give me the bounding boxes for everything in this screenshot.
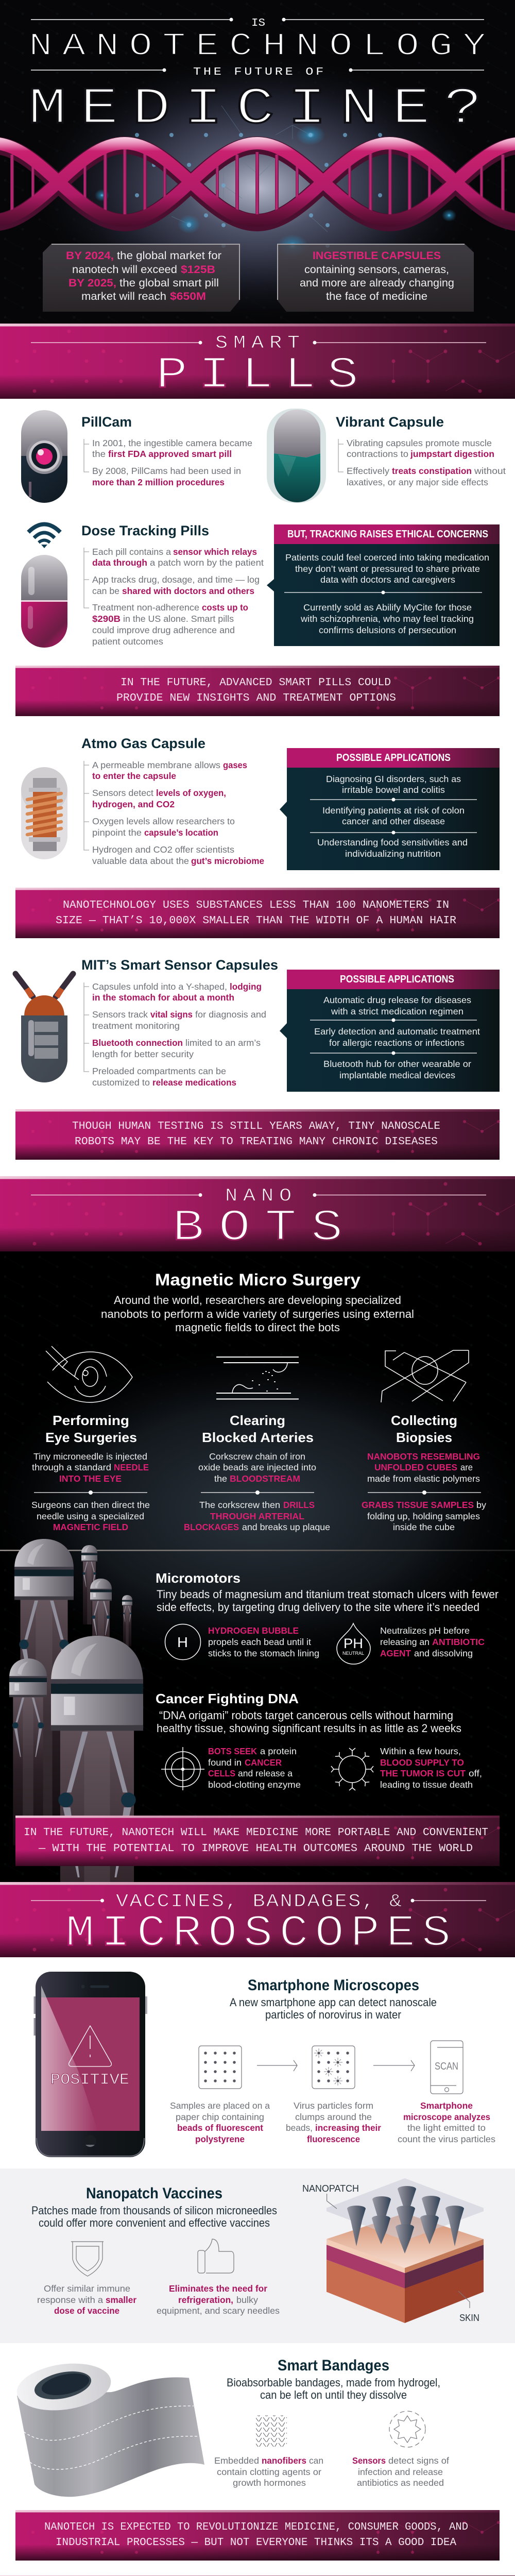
panel: possible applications mit: Automatic drug release for diseases bbox=[323, 995, 471, 1005]
icon: pillcam capsule bbox=[21, 410, 67, 503]
text block: performing eye surgeries: needle using a specialized bbox=[37, 1511, 144, 1521]
panel: white smart pills content background bbox=[0, 399, 515, 1176]
title: is nanotechnology the future of medicine: THE FUTURE OF bbox=[193, 66, 326, 78]
icon: hydrogen bubble: H bbox=[177, 1634, 188, 1650]
panel: ethical concerns: they don’t want or pressured to share private bbox=[295, 564, 480, 574]
panel: market statistics: the global smart pill bbox=[119, 277, 219, 289]
panel: possible applications atmo: Identifying patients at risk of colon bbox=[322, 805, 465, 816]
callout: revolutionize medicine bbox=[15, 2510, 500, 2561]
text block: vibrant capsule: jumpstart digestion bbox=[410, 449, 494, 459]
text block: immune response bbox=[37, 2283, 136, 2316]
text block: cancer fighting dna bbox=[156, 1691, 461, 1735]
text block: micromotors: Micromotors bbox=[156, 1570, 241, 1586]
callout: advanced smart pills: PROVIDE NEW INSIGHTS AND TREATMENT OPTIONS bbox=[116, 692, 396, 704]
text block: blood supply bbox=[380, 1746, 482, 1790]
text block: performing eye surgeries bbox=[31, 1413, 150, 1532]
text block: vibrant capsule bbox=[336, 414, 506, 487]
text block: mit smart sensor capsules: MIT’s Smart Sensor Capsules bbox=[81, 957, 278, 973]
text block: atmo gas capsule: to enter the capsule bbox=[92, 771, 176, 781]
text block: pillcam: first FDA approved smart pill bbox=[108, 449, 232, 459]
text block: refrigeration: refrigeration, bbox=[178, 2295, 233, 2305]
text block: ph neutral: Neutralizes pH before bbox=[380, 1625, 470, 1636]
text block: step two: clumps around the bbox=[295, 2112, 372, 2122]
text block: dose tracking pills: App tracks drug, dosage, and time — log bbox=[92, 574, 260, 585]
text block: atmo gas capsule bbox=[81, 736, 264, 866]
text block: collecting biopsies: by bbox=[476, 1500, 486, 1510]
panel: market statistics bbox=[43, 244, 240, 312]
text block: magnetic micro surgery: Around the world, researchers are developing specialized bbox=[114, 1294, 401, 1307]
text block: step three: the light emitted to bbox=[407, 2123, 486, 2133]
text block: bots seek bbox=[208, 1746, 301, 1790]
text block: performing eye surgeries: INTO THE EYE bbox=[59, 1473, 122, 1484]
panel: possible applications atmo bbox=[280, 748, 500, 870]
text block: mit smart sensor capsules: lodging bbox=[230, 981, 262, 992]
banner: smart pills heading bbox=[0, 324, 515, 400]
callout: revolutionize medicine: NANOTECH IS EXPECTED TO REVOLUTIONIZE MEDICINE, CONSUMER GOODS, AND bbox=[44, 2521, 468, 2533]
text block: blood supply: Within a few hours, bbox=[380, 1746, 461, 1756]
text block: atmo gas capsule: gut’s microbiome bbox=[191, 856, 264, 866]
icon: ph neutral drop: NEUTRAL bbox=[342, 1651, 364, 1656]
text block: magnetic micro surgery: Magnetic Micro Surgery bbox=[155, 1270, 360, 1289]
callout: nanoscale robots: THOUGH HUMAN TESTING IS STILL YEARS AWAY, TINY NANOSCALE bbox=[72, 1121, 440, 1132]
text block: nanopatch vaccines: could offer more convenient and effective vaccines bbox=[39, 2216, 270, 2229]
icon: mit smart sensor capsule bbox=[15, 974, 73, 1082]
panel: possible applications atmo: individualizing nutrition bbox=[345, 849, 441, 859]
text block: blood supply: BLOOD SUPPLY TO bbox=[380, 1757, 464, 1768]
icon: phone scan bbox=[431, 2041, 463, 2094]
arrow: step two to three bbox=[373, 2060, 415, 2071]
text block: dose tracking pills: Each pill contains a bbox=[92, 547, 171, 557]
panel: market statistics: $650M bbox=[170, 291, 206, 302]
text block: step one bbox=[170, 2100, 270, 2144]
text block: collecting biopsies: made from elastic polymers bbox=[367, 1473, 480, 1484]
text block: vibrant capsule: laxatives, or any major side effects bbox=[347, 477, 488, 487]
text block: step three: count the virus particles bbox=[398, 2134, 495, 2144]
text block: smart bandages: Bioabsorbable bandages, made from hydrogel, bbox=[227, 2376, 440, 2389]
text block: atmo gas capsule: Hydrogen and CO2 offer scientists bbox=[92, 844, 234, 855]
text block: immune response: response with a bbox=[37, 2295, 103, 2305]
text block: vibrant capsule: without bbox=[474, 466, 506, 476]
text block: performing eye surgeries: MAGNETIC FIELD bbox=[53, 1522, 128, 1532]
icon: wifi signal bbox=[28, 524, 60, 548]
title: is nanotechnology the future of medicine: IS bbox=[251, 18, 265, 29]
text block: sensors: antibiotics as needed bbox=[357, 2478, 444, 2488]
text block: pillcam: PillCam bbox=[81, 414, 132, 430]
text block: step one: beads of fluorescent bbox=[177, 2123, 263, 2133]
panel: ethical concerns: with schizophrenia, who may feel tracking bbox=[300, 614, 474, 624]
callout: advanced smart pills bbox=[15, 666, 500, 716]
text block: refrigeration bbox=[157, 2283, 280, 2316]
text block: mit smart sensor capsules: in the stomach for about a month bbox=[92, 992, 234, 1003]
text block: bots seek: and release a bbox=[238, 1768, 293, 1778]
panel: market statistics: market will reach bbox=[81, 291, 166, 302]
text block: dose tracking pills: Dose Tracking Pills bbox=[81, 523, 209, 538]
text block: step two: beads, bbox=[286, 2123, 313, 2133]
panel: possible applications atmo: Diagnosing GI disorders, such as bbox=[326, 774, 461, 784]
text block: atmo gas capsule: Atmo Gas Capsule bbox=[81, 736, 205, 751]
text block: performing eye surgeries: through a standard bbox=[32, 1462, 111, 1472]
text block: collecting biopsies: are bbox=[460, 1462, 473, 1472]
text block: bots seek: blood-clotting enzyme bbox=[208, 1780, 301, 1790]
text block: pillcam: the bbox=[92, 449, 106, 459]
text block: dose tracking pills: sensor which relays bbox=[173, 547, 257, 557]
text block: mit smart sensor capsules: Preloaded compartments can be bbox=[92, 1066, 226, 1076]
icon: vibrant capsule bbox=[267, 409, 326, 503]
text block: nanopatch vaccines bbox=[31, 2185, 277, 2229]
text block: step one: Samples are placed on a bbox=[170, 2100, 270, 2111]
text block: step one: paper chip containing bbox=[176, 2112, 264, 2122]
text block: clearing blocked arteries bbox=[184, 1413, 330, 1532]
text block: hydrogen bubble: propels each bead until it bbox=[208, 1637, 311, 1647]
title: is nanotechnology the future of medicine: NANOTECHNOLOGY bbox=[29, 28, 496, 64]
banner: vaccines bandages microscopes heading: VACCINES, BANDAGES, & bbox=[116, 1891, 403, 1912]
text block: pillcam bbox=[81, 414, 252, 487]
panel: market statistics: BY 2025, bbox=[68, 277, 116, 289]
illustration: micromotor robots bbox=[9, 1539, 143, 2094]
text block: pillcam: By 2008, PillCams had been used in bbox=[92, 466, 241, 476]
panel: possible applications atmo: cancer and other disease bbox=[342, 816, 445, 826]
panel: ethical concerns: Patients could feel coerced into taking medication bbox=[285, 552, 489, 563]
text block: clearing blocked arteries: BLOODSTREAM bbox=[230, 1473, 300, 1484]
text block: smart bandages: Smart Bandages bbox=[278, 2357, 389, 2374]
text block: dose tracking pills: can be bbox=[92, 586, 119, 596]
panel: possible applications mit: for allergic reactions or infections bbox=[329, 1038, 465, 1048]
text block: atmo gas capsule: levels of oxygen, bbox=[156, 788, 226, 798]
text block: bots seek: CANCER bbox=[245, 1757, 282, 1768]
text block: ph neutral bbox=[380, 1625, 485, 1658]
text block: clearing blocked arteries: THROUGH ARTERIAL bbox=[210, 1511, 304, 1521]
text block: smartphone microscopes: Smartphone Microscopes bbox=[248, 1977, 419, 1994]
icon: phone scan: SCAN bbox=[435, 2061, 458, 2072]
text block: step three: microscope analyzes bbox=[403, 2112, 490, 2122]
icon: nanofibers bbox=[256, 2415, 287, 2447]
callout: nanotechnology size: SIZE — THAT’S 10,000X SMALLER THAN THE WIDTH OF A HUMAN HAIR bbox=[56, 915, 456, 927]
title: is nanotechnology the future of medicine: MEDICINE? bbox=[28, 80, 495, 139]
callout: advanced smart pills: IN THE FUTURE, ADVANCED SMART PILLS COULD bbox=[121, 677, 391, 689]
text block: step one: polystyrene bbox=[195, 2134, 245, 2144]
text block: pillcam: more than 2 million procedures bbox=[92, 477, 225, 487]
panel: market statistics: the global market for bbox=[117, 250, 221, 262]
text block: cancer fighting dna: healthy tissue, showing significant results in as little as 2 weeks bbox=[157, 1722, 461, 1735]
text block: collecting biopsies: folding up, holding samples bbox=[367, 1511, 480, 1521]
text block: dose tracking pills: Treatment non-adherence bbox=[92, 602, 199, 613]
banner: nano bots heading: NANO bbox=[225, 1186, 297, 1207]
text block: collecting biopsies: UNFOLDED CUBES bbox=[374, 1462, 457, 1472]
illustration: nanopatch on skin: SKIN bbox=[459, 2313, 479, 2323]
text block: cancer fighting dna: “DNA origami” robots target cancerous cells without harming bbox=[159, 1709, 453, 1722]
text block: blood supply: THE TUMOR IS CUT bbox=[380, 1768, 466, 1778]
panel: market statistics: BY 2024, bbox=[66, 250, 114, 262]
text block: performing eye surgeries: Performing bbox=[53, 1413, 129, 1428]
panel: possible applications mit: implantable medical devices bbox=[339, 1070, 455, 1080]
text block: atmo gas capsule: Oxygen levels allow researchers to bbox=[92, 816, 235, 826]
text block: smart bandages: can be left on until they dissolve bbox=[260, 2388, 407, 2401]
text block: mit smart sensor capsules: Sensors track bbox=[92, 1009, 148, 1020]
text block: sensors bbox=[352, 2455, 449, 2488]
callout: nanoscale robots: ROBOTS MAY BE THE KEY TO TREATING MANY CHRONIC DISEASES bbox=[75, 1136, 438, 1148]
panel: ingestible capsules: and more are already changing bbox=[300, 277, 454, 289]
icon: ph neutral drop bbox=[337, 1623, 370, 1664]
banner: smart pills heading: SMART bbox=[215, 333, 305, 353]
panel: ingestible capsules bbox=[277, 244, 474, 312]
panel: ethical concerns: data with doctors and caregivers bbox=[320, 574, 455, 585]
text block: immune response: Offer similar immune bbox=[44, 2283, 130, 2294]
text block: step two bbox=[286, 2100, 381, 2144]
text block: atmo gas capsule: hydrogen, and CO2 bbox=[92, 799, 175, 809]
text block: immune response: dose of vaccine bbox=[54, 2306, 119, 2316]
illustration: nanopatch on skin bbox=[302, 2178, 484, 2323]
icon: dose tracking pill bbox=[21, 555, 67, 648]
text block: bots seek: CELLS bbox=[208, 1768, 235, 1778]
text block: hydrogen bubble bbox=[208, 1625, 319, 1658]
text block: atmo gas capsule: capsule’s location bbox=[144, 827, 218, 838]
text block: performing eye surgeries: Surgeons can then direct the bbox=[31, 1500, 150, 1510]
text block: nanofibers bbox=[214, 2455, 323, 2488]
panel: possible applications atmo: irritable bowel and colitis bbox=[342, 785, 445, 795]
text block: mit smart sensor capsules: treatment monitoring bbox=[92, 1021, 180, 1031]
text block: smartphone microscopes: particles of norovirus in water bbox=[265, 2008, 401, 2021]
text block: mit smart sensor capsules: vital signs bbox=[150, 1009, 193, 1020]
text block: smart bandages bbox=[227, 2357, 440, 2401]
icon: blocked artery bbox=[216, 1357, 299, 1399]
arrow: step one to two bbox=[257, 2060, 297, 2071]
text block: performing eye surgeries: Tiny microneedle is injected bbox=[33, 1451, 147, 1462]
text block: dose tracking pills: shared with doctors and others bbox=[122, 586, 254, 596]
text block: mit smart sensor capsules: customized to bbox=[92, 1077, 150, 1088]
text block: step three: Smartphone bbox=[420, 2100, 473, 2111]
icon: shield bbox=[71, 2242, 104, 2276]
text block: magnetic micro surgery: nanobots to perform a wide variety of surgeries using external bbox=[101, 1308, 414, 1320]
callout: nanotechnology size: NANOTECHNOLOGY USES SUBSTANCES LESS THAN 100 NANOMETERS IN bbox=[63, 900, 449, 911]
text block: dose tracking pills: costs up to bbox=[202, 602, 248, 613]
panel: header background bbox=[0, 0, 515, 332]
text block: collecting biopsies bbox=[362, 1413, 486, 1532]
text block: performing eye surgeries: Eye Surgeries bbox=[45, 1430, 137, 1445]
panel: ingestible capsules: INGESTIBLE CAPSULES bbox=[313, 250, 441, 262]
icon: ph neutral drop: PH bbox=[344, 1636, 363, 1651]
text block: atmo gas capsule: A permeable membrane allows bbox=[92, 760, 220, 770]
text block: nanofibers: contain clotting agents or bbox=[217, 2467, 321, 2477]
banner: nano bots heading: BOTS bbox=[172, 1202, 357, 1253]
text block: step two: Virus particles form bbox=[294, 2100, 373, 2111]
text block: smartphone microscopes: A new smartphone app can detect nanoscale bbox=[230, 1996, 437, 2009]
panel: ethical concerns: confirms delusions of persecution bbox=[319, 625, 456, 635]
banner: vaccines bandages microscopes heading: MICROSCOPES bbox=[65, 1908, 457, 1959]
callout: nanotechnology size bbox=[15, 888, 500, 938]
text block: step three bbox=[398, 2100, 495, 2144]
text block: mit smart sensor capsules bbox=[81, 957, 278, 1088]
text block: collecting biopsies: NANOBOTS RESEMBLING bbox=[367, 1451, 480, 1462]
callout: portable medicine: — WITH THE POTENTIAL TO IMPROVE HEALTH OUTCOMES AROUND THE WORLD bbox=[38, 1843, 473, 1855]
banner: challenges heading bbox=[0, 2575, 515, 2576]
panel: possible applications mit: with a strict medication regimen bbox=[331, 1006, 464, 1016]
callout: portable medicine bbox=[15, 1816, 500, 1866]
text block: vibrant capsule: contractions to bbox=[347, 449, 408, 459]
text block: micromotors: Tiny beads of magnesium and titanium treat stomach ulcers with fewer bbox=[157, 1588, 499, 1601]
text block: ph neutral: ANTIBIOTIC bbox=[432, 1637, 485, 1647]
panel: ethical concerns: BUT, TRACKING RAISES ETHICAL CONCERNS bbox=[287, 529, 488, 540]
text block: blood supply: leading to tissue death bbox=[380, 1780, 473, 1790]
text block: immune response: smaller bbox=[106, 2295, 136, 2305]
panel: market statistics: $125B bbox=[181, 264, 215, 276]
text block: vibrant capsule: Vibrating capsules promote muscle bbox=[347, 438, 492, 448]
text block: nanofibers: Embedded bbox=[214, 2455, 259, 2466]
text block: dose tracking pills bbox=[81, 523, 264, 647]
banner: smart pills heading: PILLS bbox=[156, 350, 370, 400]
panel: nanobots dark background bbox=[0, 1251, 515, 1882]
text block: dose tracking pills: $290B bbox=[92, 614, 121, 624]
text block: clearing blocked arteries: Corkscrew chain of iron bbox=[209, 1451, 305, 1462]
illustration: smartphone positive result: POSITIVE bbox=[50, 2071, 129, 2089]
icon: thumbs up bbox=[198, 2239, 234, 2273]
text block: sensors: infection and release bbox=[358, 2467, 443, 2477]
text block: nanopatch vaccines: Nanopatch Vaccines bbox=[86, 2185, 222, 2202]
text block: collecting biopsies: Biopsies bbox=[396, 1430, 452, 1445]
text block: step two: fluorescence bbox=[307, 2134, 360, 2144]
icon: eye surgery bbox=[46, 1346, 132, 1402]
text block: clearing blocked arteries: oxide beads are injected into bbox=[198, 1462, 316, 1472]
text block: pillcam: In 2001, the ingestible camera became bbox=[92, 438, 252, 448]
title: is nanotechnology the future of medicine bbox=[28, 18, 496, 139]
text block: vibrant capsule: Effectively bbox=[347, 466, 389, 476]
panel: possible applications mit bbox=[280, 970, 500, 1092]
text block: mit smart sensor capsules: limited to an arm’s bbox=[185, 1038, 261, 1048]
text block: bots seek: a protein bbox=[260, 1746, 297, 1756]
text block: hydrogen bubble: sticks to the stomach lining bbox=[208, 1648, 319, 1658]
text block: dose tracking pills: patient outcomes bbox=[92, 636, 163, 647]
text block: dose tracking pills: in the US alone. Smart pills bbox=[123, 614, 234, 624]
text block: mit smart sensor capsules: Bluetooth connection bbox=[92, 1038, 183, 1048]
text block: collecting biopsies: GRABS TISSUE SAMPLES bbox=[362, 1500, 474, 1510]
text block: vibrant capsule: Vibrant Capsule bbox=[336, 414, 444, 430]
text block: performing eye surgeries: NEEDLE bbox=[114, 1462, 149, 1472]
text block: clearing blocked arteries: and breaks up plaque bbox=[242, 1522, 330, 1532]
icon: chip with fluorescent clumps bbox=[312, 2046, 355, 2089]
text block: clearing blocked arteries: BLOCKAGES bbox=[184, 1522, 239, 1532]
text block: clearing blocked arteries: Blocked Arteries bbox=[202, 1430, 314, 1445]
text block: ph neutral: and dissolving bbox=[414, 1648, 473, 1658]
text block: clearing blocked arteries: the bbox=[214, 1473, 227, 1484]
icon: sensor gear bbox=[389, 2411, 425, 2447]
text block: refrigeration: equipment, and scary needles bbox=[157, 2306, 280, 2316]
panel: white vaccines content background bbox=[0, 1957, 515, 2575]
text block: ph neutral: AGENT bbox=[380, 1648, 411, 1658]
text block: step two: increasing their bbox=[315, 2123, 381, 2133]
text block: atmo gas capsule: Sensors detect bbox=[92, 788, 153, 798]
text block: mit smart sensor capsules: for diagnosis and bbox=[195, 1009, 266, 1020]
panel: possible applications mit: Bluetooth hub for other wearable or bbox=[323, 1059, 471, 1069]
text block: magnetic micro surgery bbox=[101, 1270, 414, 1334]
text block: ph neutral: releasing an bbox=[380, 1637, 430, 1647]
text block: atmo gas capsule: gases bbox=[223, 760, 247, 770]
text block: clearing blocked arteries: DRILLS bbox=[283, 1500, 315, 1510]
icon: atmo gas capsule bbox=[21, 767, 67, 859]
text block: hydrogen bubble: HYDROGEN BUBBLE bbox=[208, 1625, 299, 1636]
icon: tumor cell bbox=[331, 1748, 373, 1790]
icon: unfolded cube biopsy bbox=[381, 1350, 469, 1402]
text block: refrigeration: bulky bbox=[236, 2295, 258, 2305]
text block: mit smart sensor capsules: length for better security bbox=[92, 1049, 194, 1059]
illustration: bandage roll bbox=[14, 2358, 204, 2497]
text block: atmo gas capsule: valuable data about the bbox=[92, 856, 189, 866]
icon: paper chip with beads bbox=[199, 2046, 242, 2089]
icon: target bbox=[161, 1747, 204, 1790]
text block: nanofibers: growth hormones bbox=[233, 2478, 306, 2488]
text block: bots seek: found in bbox=[208, 1757, 242, 1768]
text block: sensors: Sensors bbox=[352, 2455, 386, 2466]
icon: hydrogen bubble bbox=[165, 1624, 201, 1660]
panel: market statistics: nanotech will exceed bbox=[72, 264, 177, 276]
panel: ethical concerns bbox=[267, 524, 500, 646]
text block: magnetic micro surgery: magnetic fields to direct the bots bbox=[175, 1321, 340, 1334]
panel: ingestible capsules: the face of medicine bbox=[326, 291, 427, 302]
text block: sensors: detect signs of bbox=[388, 2455, 449, 2466]
text block: collecting biopsies: inside the cube bbox=[393, 1522, 455, 1532]
text block: nanofibers: nanofibers bbox=[262, 2455, 306, 2466]
text block: smartphone microscopes bbox=[230, 1977, 437, 2021]
text block: mit smart sensor capsules: Capsules unfold into a Y-shaped, bbox=[92, 981, 227, 992]
text block: clearing blocked arteries: The corkscrew then bbox=[199, 1500, 280, 1510]
text block: refrigeration: Eliminates the need for bbox=[169, 2283, 267, 2294]
text block: clearing blocked arteries: Clearing bbox=[230, 1413, 285, 1428]
callout: revolutionize medicine: INDUSTRIAL PROCESSES — BUT NOT EVERYONE THINKS ITS A GOOD IDEA bbox=[56, 2537, 456, 2549]
text block: micromotors: side effects, by targeting drug delivery to the site where it’s needed bbox=[157, 1601, 479, 1614]
banner: vaccines bandages microscopes heading bbox=[0, 1882, 515, 1959]
panel: ethical concerns: Currently sold as Abilify MyCite for those bbox=[303, 602, 472, 613]
text block: cancer fighting dna: Cancer Fighting DNA bbox=[156, 1691, 299, 1706]
panel: ingestible capsules: containing sensors, cameras, bbox=[304, 264, 449, 276]
panel: possible applications atmo: Understanding food sensitivities and bbox=[317, 837, 468, 848]
text block: atmo gas capsule: pinpoint the bbox=[92, 827, 142, 838]
panel: possible applications mit: Early detection and automatic treatment bbox=[314, 1026, 480, 1037]
illustration: nanopatch on skin: NANOPATCH bbox=[302, 2183, 359, 2194]
illustration: smartphone positive result bbox=[34, 1972, 147, 2157]
banner: nano bots heading bbox=[0, 1176, 515, 1253]
callout: portable medicine: IN THE FUTURE, NANOTECH WILL MAKE MEDICINE MORE PORTABLE AND CONVENIENT bbox=[24, 1827, 488, 1839]
text block: dose tracking pills: data through bbox=[92, 557, 147, 568]
text block: dose tracking pills: a patch worn by the patient bbox=[150, 557, 264, 568]
callout: nanoscale robots bbox=[15, 1109, 500, 1160]
panel: possible applications mit: POSSIBLE APPLICATIONS bbox=[340, 974, 454, 985]
text block: vibrant capsule: treats constipation bbox=[392, 466, 472, 476]
panel: nanopatch vaccines background bbox=[0, 2168, 515, 2343]
text block: collecting biopsies: Collecting bbox=[391, 1413, 457, 1428]
text block: bots seek: BOTS SEEK bbox=[208, 1746, 257, 1756]
text block: micromotors bbox=[156, 1570, 499, 1614]
text block: dose tracking pills: could improve drug adherence and bbox=[92, 625, 235, 635]
text block: blood supply: off, bbox=[469, 1768, 482, 1778]
text block: mit smart sensor capsules: release medications bbox=[152, 1077, 236, 1088]
illustration: dna double helix bbox=[0, 143, 515, 223]
panel: possible applications atmo: POSSIBLE APPLICATIONS bbox=[336, 752, 451, 764]
text block: nanofibers: can bbox=[309, 2455, 323, 2466]
text block: nanopatch vaccines: Patches made from thousands of silicon microneedles bbox=[31, 2204, 277, 2217]
